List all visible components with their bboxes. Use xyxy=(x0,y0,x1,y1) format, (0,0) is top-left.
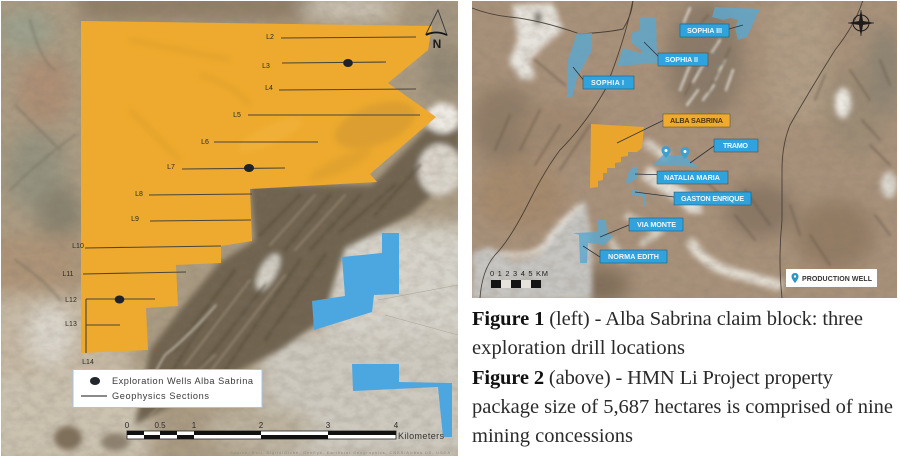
scale bar: 4 xyxy=(394,421,399,430)
label: Natalia Maria: NATALIA MARIA xyxy=(664,173,720,182)
geophysics sections lines and labels: L6 xyxy=(201,139,209,146)
legend: Geophysics Sections xyxy=(112,391,209,401)
label: Sophia II xyxy=(658,53,708,66)
icon: compass rose xyxy=(848,10,874,36)
scale bar: Kilometers xyxy=(398,431,444,441)
scale bar xyxy=(125,422,444,440)
legend xyxy=(73,370,262,408)
icon: production well pins xyxy=(662,146,690,159)
scale bar: 0.5 xyxy=(154,421,166,430)
label: Sophia II: SOPHIA II xyxy=(665,55,698,64)
scale bar: 0 1 2 3 4 5 KM xyxy=(490,269,548,278)
label: Tramo xyxy=(714,139,758,152)
caption: Figure 1 and Figure 2 text block: mining concessions xyxy=(472,425,633,447)
geophysics sections lines and labels: L11 xyxy=(62,271,74,278)
label: Gaston Enrique: GASTON ENRIQUE xyxy=(681,194,744,203)
source attribution: Source: Esri, DigitalGlobe, GeoEye, Earthstar Geographics, CNES/Airbus DS, USDA xyxy=(230,450,450,455)
label: Tramo: TRAMO xyxy=(723,141,748,150)
leader lines xyxy=(573,25,743,257)
label: Alba Sabrina xyxy=(663,114,730,127)
roads xyxy=(472,0,863,298)
label: Sophia I xyxy=(583,76,634,89)
concessions: blue polygons xyxy=(312,233,452,437)
geophysics sections lines and labels: L9 xyxy=(131,216,139,223)
geophysics sections lines and labels: L4 xyxy=(265,85,273,92)
claim block: Alba Sabrina (orange) xyxy=(590,124,644,188)
geophysics sections lines and labels: L13 xyxy=(65,321,77,328)
caption: Figure 1 and Figure 2 text block: exploration drill locations xyxy=(472,337,685,359)
exploration well markers xyxy=(115,59,353,304)
label: Sophia III: SOPHIA III xyxy=(687,26,722,35)
scale bar: 1 xyxy=(192,421,197,430)
geophysics sections lines and labels: L8 xyxy=(135,191,143,198)
panel: Figure 1 satellite map of Alba Sabrina xyxy=(0,0,475,458)
salt flats xyxy=(509,3,563,80)
label: Sophia I: SOPHIA I xyxy=(591,78,624,87)
scale bar: 0 xyxy=(125,421,130,430)
label: Sophia III xyxy=(680,24,729,37)
label: Norma Edith: NORMA EDITH xyxy=(608,252,659,261)
caption: Figure 1 and Figure 2 text block: package size of 5,687 hectares is comprised of nine xyxy=(472,396,893,418)
label: Via Monte: VIA MONTE xyxy=(637,220,676,229)
caption: Figure 1 and Figure 2 text block xyxy=(472,308,893,447)
label: Norma Edith xyxy=(600,250,667,263)
faint plain tracks xyxy=(378,285,458,335)
mountain snow and ridges xyxy=(680,8,733,105)
label: Alba Sabrina: ALBA SABRINA xyxy=(670,116,723,125)
dark ridge band xyxy=(54,103,462,451)
geophysics sections lines and labels: L7 xyxy=(167,164,175,171)
geophysics sections lines and labels: L5 xyxy=(233,112,241,119)
scale bar: 3 xyxy=(326,421,331,430)
legend: production well xyxy=(786,269,877,287)
satellite terrain background xyxy=(470,0,900,303)
geophysics sections lines and labels: L12 xyxy=(65,297,77,304)
concessions: blue polygons xyxy=(567,7,760,263)
caption: Figure 1 and Figure 2 text block: Figure 2 (above) - HMN Li Project property xyxy=(472,367,834,389)
label: Via Monte xyxy=(629,218,683,231)
legend: production well: PRODUCTION WELL xyxy=(802,276,873,283)
scale bar xyxy=(490,271,548,288)
caption: Figure 1 and Figure 2 text block: Figure 1 (left) - Alba Sabrina claim block: three xyxy=(472,308,863,330)
geophysics sections lines and labels: L10 xyxy=(72,243,84,250)
claim block: Alba Sabrina (orange) xyxy=(81,21,436,353)
legend: Exploration Wells Alba Sabrina xyxy=(112,376,254,386)
geophysics sections lines and labels: L2 xyxy=(266,34,274,41)
ridge streaks xyxy=(10,20,420,415)
scale bar: 2 xyxy=(259,421,264,430)
label: Gaston Enrique xyxy=(674,192,751,205)
geophysics sections lines and labels: L14 xyxy=(82,359,94,366)
geophysics sections lines and labels xyxy=(62,34,420,366)
icon: north arrow xyxy=(426,10,447,51)
label: Natalia Maria xyxy=(657,171,728,184)
panel: Figure 2 HMN Li Project property map xyxy=(470,0,900,303)
satellite terrain background xyxy=(0,0,475,458)
icon: north arrow: N xyxy=(433,37,441,51)
geophysics sections lines and labels: L3 xyxy=(262,63,270,70)
